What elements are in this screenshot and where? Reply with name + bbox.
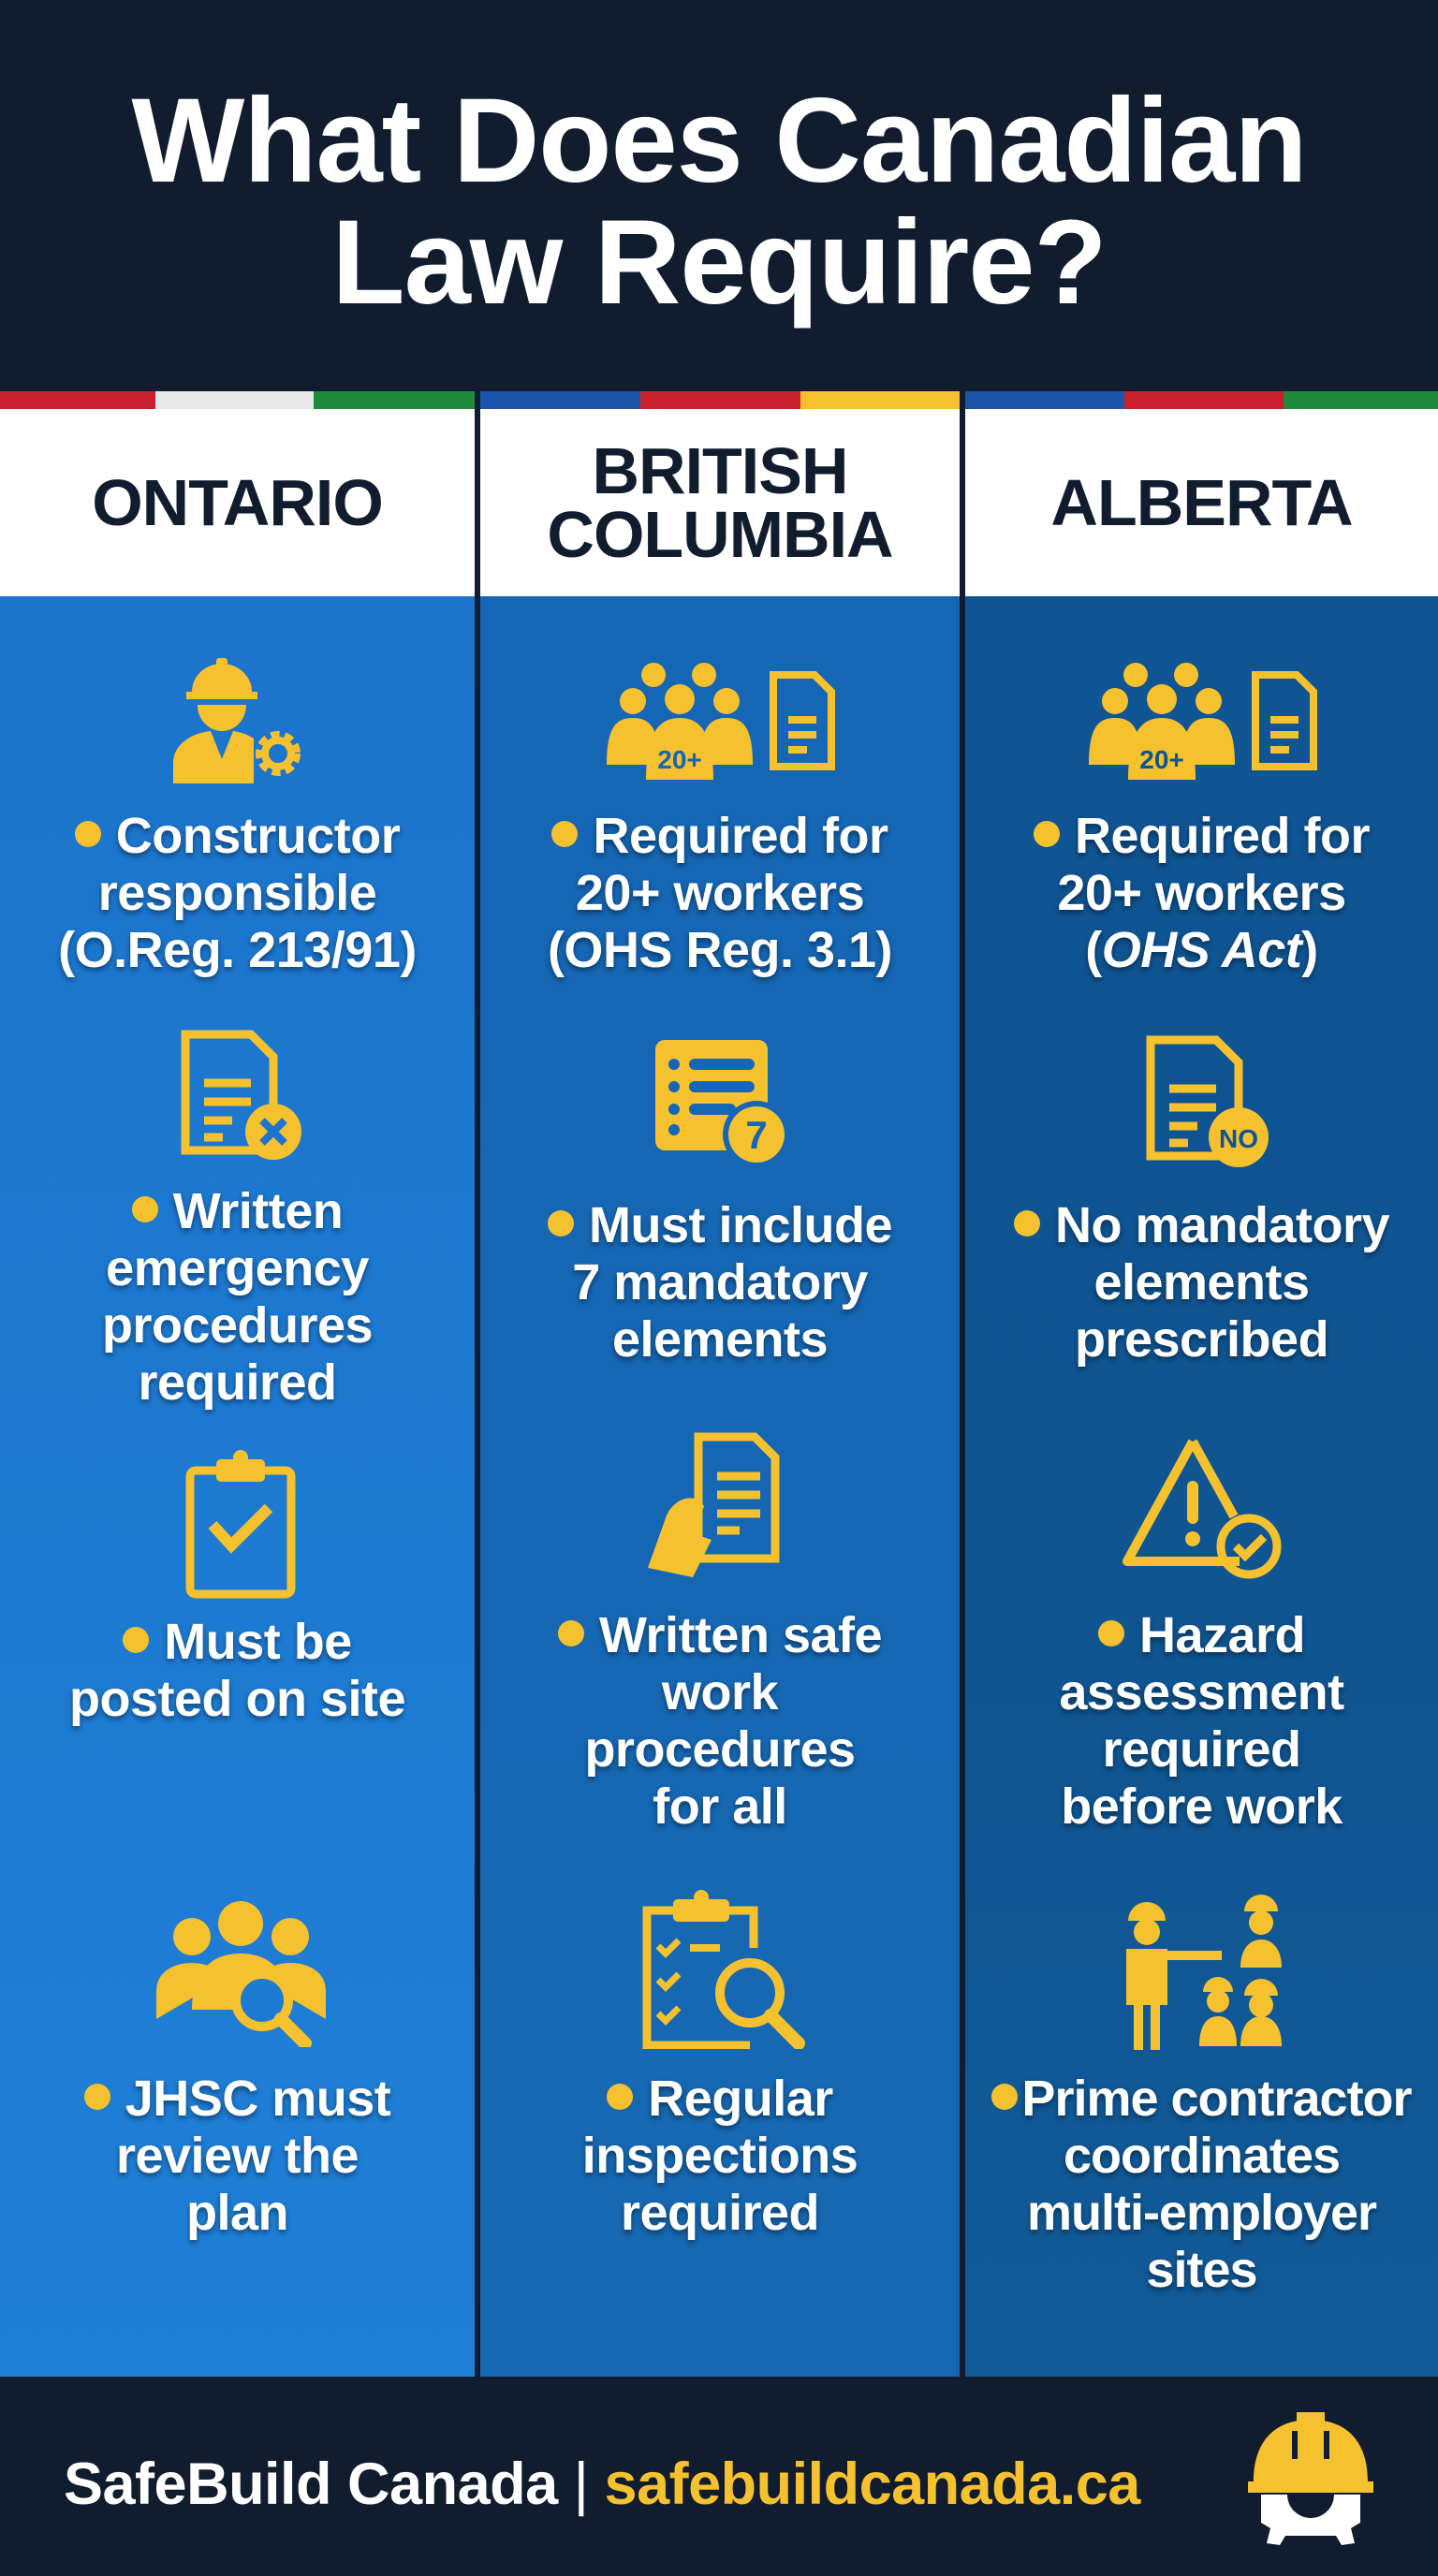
text: inspections: Regular [648, 2071, 833, 2127]
header: British Columbia: COLUMBIA [547, 498, 893, 571]
text: required 20+ [547, 808, 893, 983]
text: prime contractor [991, 2071, 1414, 2298]
text: prime contractor: coordinates [1064, 2128, 1340, 2184]
icon: helmet gear logo [1248, 2412, 1373, 2545]
icon: document x [182, 1030, 301, 1160]
text: emergency procedures: required [138, 1354, 337, 1411]
header: Ontario [0, 409, 475, 596]
icon: prime contractor workers [1126, 1895, 1282, 2050]
text: constructor: responsible [98, 865, 376, 921]
footer [0, 2377, 1438, 2576]
icon: 20+ workers doc [607, 663, 835, 780]
text: required 20+: (OHS Act) [1085, 922, 1318, 978]
text: emergency procedures: Written [173, 1183, 343, 1239]
text: JHSC: JHSC must [125, 2071, 390, 2127]
text: hazard assessment: Hazard [1139, 1607, 1305, 1663]
icon: document NO: NO [1219, 1124, 1258, 1153]
text: required 20+: Required for [593, 808, 888, 864]
text: required 20+: 20+ workers [576, 865, 864, 921]
text: safe work procedures: work [662, 1664, 778, 1720]
text: emergency procedures: procedures [102, 1297, 373, 1354]
header: British Columbia: BRITISH [592, 434, 848, 507]
text: required 20+: (OHS Reg. 3.1) [548, 922, 892, 978]
text: constructor: (O.Reg. 213/91) [58, 922, 417, 978]
text: constructor [57, 808, 418, 983]
icon: hand holding document [648, 1432, 779, 1577]
text: JHSC [84, 2071, 393, 2247]
text: required 20+: Required for [1075, 808, 1370, 864]
text: safe work procedures: Written safe [599, 1607, 882, 1663]
icon: 20+ workers doc: 20+ [657, 745, 702, 774]
text: no mandatory: No mandatory [1055, 1197, 1389, 1253]
text: inspections: required [621, 2185, 819, 2241]
panel: Ontario [0, 596, 475, 2377]
text: no mandatory: elements [1093, 1254, 1310, 1310]
header: Alberta [965, 409, 1438, 596]
text: safe work procedures [558, 1607, 884, 1835]
text: emergency procedures [102, 1183, 374, 1415]
text: prime contractor: Prime contractor [1021, 2071, 1412, 2127]
icon: document NO [1146, 1035, 1269, 1167]
text: safe work procedures: procedures [584, 1721, 856, 1778]
text: prime contractor: multi-employer [1027, 2185, 1376, 2241]
icon: 20+ workers doc [1089, 663, 1317, 780]
text: safe work procedures: for all [653, 1778, 787, 1835]
panel: British Columbia [480, 596, 960, 2377]
title: What Does Canadian [131, 74, 1307, 208]
footer text: SafeBuild Canada | safebuildcanada.ca [64, 2452, 1140, 2517]
text: 7 mandatory: 7 mandatory [572, 1254, 868, 1310]
icon: group with magnifier [156, 1901, 326, 2047]
icon: worker with gear [173, 658, 301, 783]
text: no mandatory: prescribed [1075, 1311, 1328, 1368]
text: posted on site: posted on site [69, 1671, 405, 1727]
color stripes [0, 391, 1438, 409]
header: Ontario: ONTARIO [92, 466, 383, 539]
text: JHSC: plan [186, 2185, 288, 2241]
title: Law Require? [331, 196, 1107, 329]
text: 7 mandatory: Must include [589, 1197, 892, 1253]
text: no mandatory [1014, 1197, 1391, 1372]
icon: 20+ workers doc: 20+ [1139, 745, 1184, 774]
text: prime contractor: sites [1146, 2242, 1257, 2298]
text: required 20+ [1034, 808, 1372, 983]
text: hazard assessment: before work [1061, 1778, 1343, 1835]
text: hazard assessment [1058, 1607, 1346, 1835]
header: British Columbia [480, 409, 960, 596]
icon: warning check [1123, 1440, 1281, 1578]
text: inspections [582, 2071, 859, 2247]
text: posted on site [69, 1614, 407, 1732]
icon: list with 7: 7 [745, 1113, 768, 1157]
text: JHSC: review the [116, 2128, 359, 2184]
text: inspections: inspections [582, 2128, 858, 2184]
text: constructor: Constructor [116, 808, 400, 864]
text: 7 mandatory: elements [612, 1311, 828, 1368]
text: emergency procedures: emergency [106, 1240, 369, 1296]
icon: list with 7 [655, 1040, 785, 1163]
text: hazard assessment: assessment [1059, 1664, 1344, 1720]
panel: Alberta [965, 596, 1438, 2377]
text: 7 mandatory [548, 1197, 893, 1368]
text: posted on site: Must be [164, 1614, 352, 1670]
header: Alberta: ALBERTA [1050, 466, 1353, 539]
icon: clipboard check [185, 1450, 296, 1599]
title [131, 74, 1307, 329]
text: required 20+: 20+ workers [1057, 865, 1346, 921]
icon: clipboard magnifier [642, 1890, 805, 2049]
text: hazard assessment: required [1102, 1721, 1301, 1778]
